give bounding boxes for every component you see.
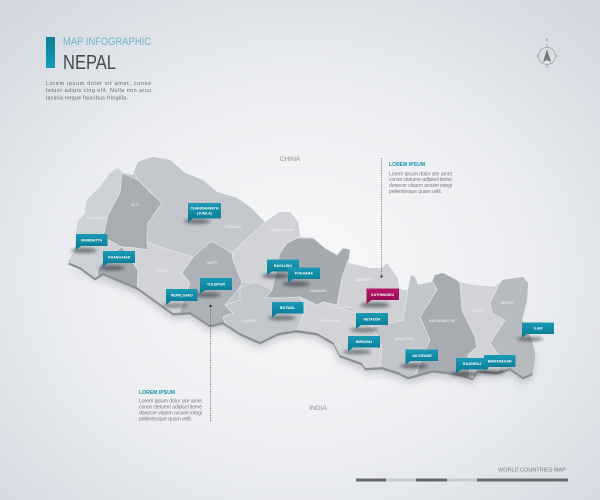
region labels: GANDAKI [309,289,327,293]
region labels: SAGARMATHA [429,319,456,323]
pin: Chandannath (Jumla): CHANDANNATH [191,206,219,210]
pin: Chandannath (Jumla): (JUMLA) [197,212,213,216]
region: Rapti [178,242,242,326]
pin: Bhimdatta [71,234,108,253]
pin: Tulsipur [195,278,232,297]
dotted line: north callout [380,158,382,276]
text block: north callout: LOREM IPSUM [389,162,425,168]
dotted line: south callout [210,307,212,422]
region: Bagmati [337,255,408,328]
pin: Jaleswar: JALESWAR [412,354,432,358]
title accent bar [46,37,55,68]
region: Seti [103,173,162,250]
pin: Kathmandu: KATHMANDU [371,293,395,297]
text block: north callout: pellentesque quam velit. [389,189,442,195]
pin: Bhimdatta: BHIMDATTA [81,238,103,242]
icon: compass: N [546,37,549,42]
pin: Dhangadhi: DHANGADHI [108,256,130,260]
text block: north callout [389,162,453,195]
region labels: MECHI [501,301,513,305]
map of Nepal [60,150,540,385]
marker: south callout [209,305,212,307]
text block: south callout: conse ctetuere adipisel iteme [139,404,202,410]
region: Gandaki [265,238,355,305]
map thickness [68,225,535,380]
pin: Baglung: BAGLUNG [274,264,292,268]
region labels: NARAYANI [321,319,339,323]
intro text: tetuer adipis cing elit. Nulla non arcu [46,88,151,94]
text block: south callout: LOREM IPSUM [139,390,175,396]
region: Lumbini [222,282,304,342]
region labels: SETI [131,203,139,207]
pin: Nepalganj: NEPALGANJ [171,294,193,298]
pin: Baglung [262,260,299,279]
text block: south callout [139,390,203,422]
region: Dhangadhi [97,248,138,288]
intro text: lacinia neque faucibus fringilla. [46,96,128,102]
region labels [87,203,513,341]
text block: north callout: conse ctetuere adipisel iteme [389,177,452,183]
title block [63,36,151,74]
region: Narayani [295,297,382,372]
region labels: LUMBINI [241,319,257,323]
pin: Birgunj [343,336,380,354]
region labels: KOSHI [471,309,483,313]
pin: Chandannath (Jumla) [184,203,221,224]
map base [60,150,540,385]
region: Janakpur [374,275,436,377]
region: Koshi [460,280,505,385]
region labels: BAGMATI [356,278,372,282]
pin: Dhangadhi [99,251,135,270]
label: India: INDIA [309,405,327,412]
pin: Birgunj: BIRGUNJ [356,340,372,344]
text block: south callout: Lorem ipsum dolor site amet [139,398,203,404]
pin: Hetauda [350,313,388,332]
intro text [46,81,151,102]
region labels: MAHAKALI [87,216,107,220]
scale label: WORLD COUNTRIES MAP [498,468,566,474]
map shadow [68,268,535,384]
region: Bheri [122,242,193,318]
region: Karnali [134,157,264,256]
region labels: KARNALI [225,225,241,229]
pin: Pokhara [282,268,320,287]
scale bar [356,478,568,482]
pin: Butwal [268,302,304,320]
pin: Pokhara: POKHARA [295,272,313,276]
pin: Ilam: ILAM [534,327,542,331]
icon: compass [535,37,559,68]
text block: north callout: donecer vitaem arcuire integi [389,183,452,189]
region labels: BHERI [157,269,169,273]
pin: Hetauda: HETAUDA [363,318,381,322]
title block: MAP INFOGRAPHIC [63,36,151,48]
intro text: Lorem ipsum dolor sit amet, conse [46,81,151,87]
text block: south callout: donecer vitaem arcuire integi [139,410,202,416]
pin: Biratnagar: BIRATNAGAR [488,360,512,364]
pin: Butwal: BUTWAL [280,306,296,310]
text block: north callout: Lorem ipsum dolor site amet [389,172,453,178]
text block: south callout: pellentesque quam velit. [139,416,192,422]
region: Mahakali [68,168,122,278]
region labels: JANAKPUR [394,337,414,341]
pin: Rajbiraj: RAJBIRAJ [463,362,481,366]
region labels: RAPTI [206,261,218,265]
region: Sagarmatha [416,273,476,378]
region: Mechi [498,277,535,377]
region: Dhaulagiri [232,212,300,290]
pin: Rajbiraj [451,358,488,377]
label: China: CHINA [280,156,301,163]
pin: Biratnagar [477,355,516,374]
title block: NEPAL [63,52,116,74]
marker: north callout [380,275,383,278]
pin: Tulsipur: TULSIPUR [207,282,225,286]
region labels: DHAULAGIRI [270,228,294,232]
pin: Kathmandu [360,288,399,308]
pin: Ilam [517,322,554,341]
pin: Nepalganj [162,289,198,308]
pin: Jaleswar [400,350,438,369]
